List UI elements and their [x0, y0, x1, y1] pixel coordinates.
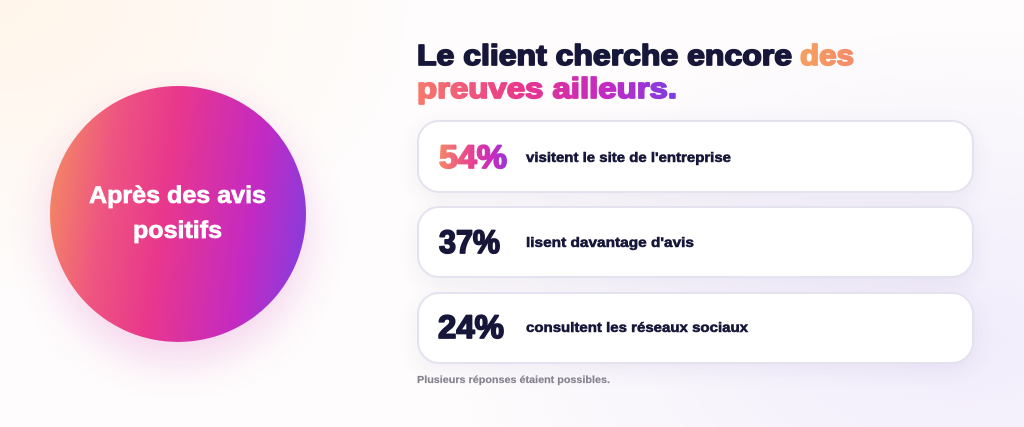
card: 54%	[417, 120, 974, 193]
stat: 54%: 54%	[439, 139, 507, 175]
heading: preuves ailleurs.	[417, 73, 677, 105]
card: 24%	[417, 292, 974, 364]
circle: après des avis positifs	[50, 86, 306, 342]
card: 37%	[417, 206, 974, 278]
stat: 37%: 37%	[439, 224, 500, 260]
stat: 24%: 24%	[438, 309, 504, 345]
footnote: Plusieurs réponses étaient possibles.	[417, 374, 610, 386]
heading	[417, 40, 854, 105]
label: 24%: consultent les réseaux sociaux	[526, 319, 748, 335]
circle label: Après des avis	[89, 182, 266, 209]
circle label: positifs	[133, 217, 222, 244]
label: 54%: visitent le site de l'entreprise	[526, 149, 731, 165]
label: 37%: lisent davantage d'avis	[526, 234, 694, 250]
heading: Le client cherche encore	[417, 40, 792, 72]
heading: des	[800, 40, 854, 72]
circle label	[89, 182, 266, 244]
